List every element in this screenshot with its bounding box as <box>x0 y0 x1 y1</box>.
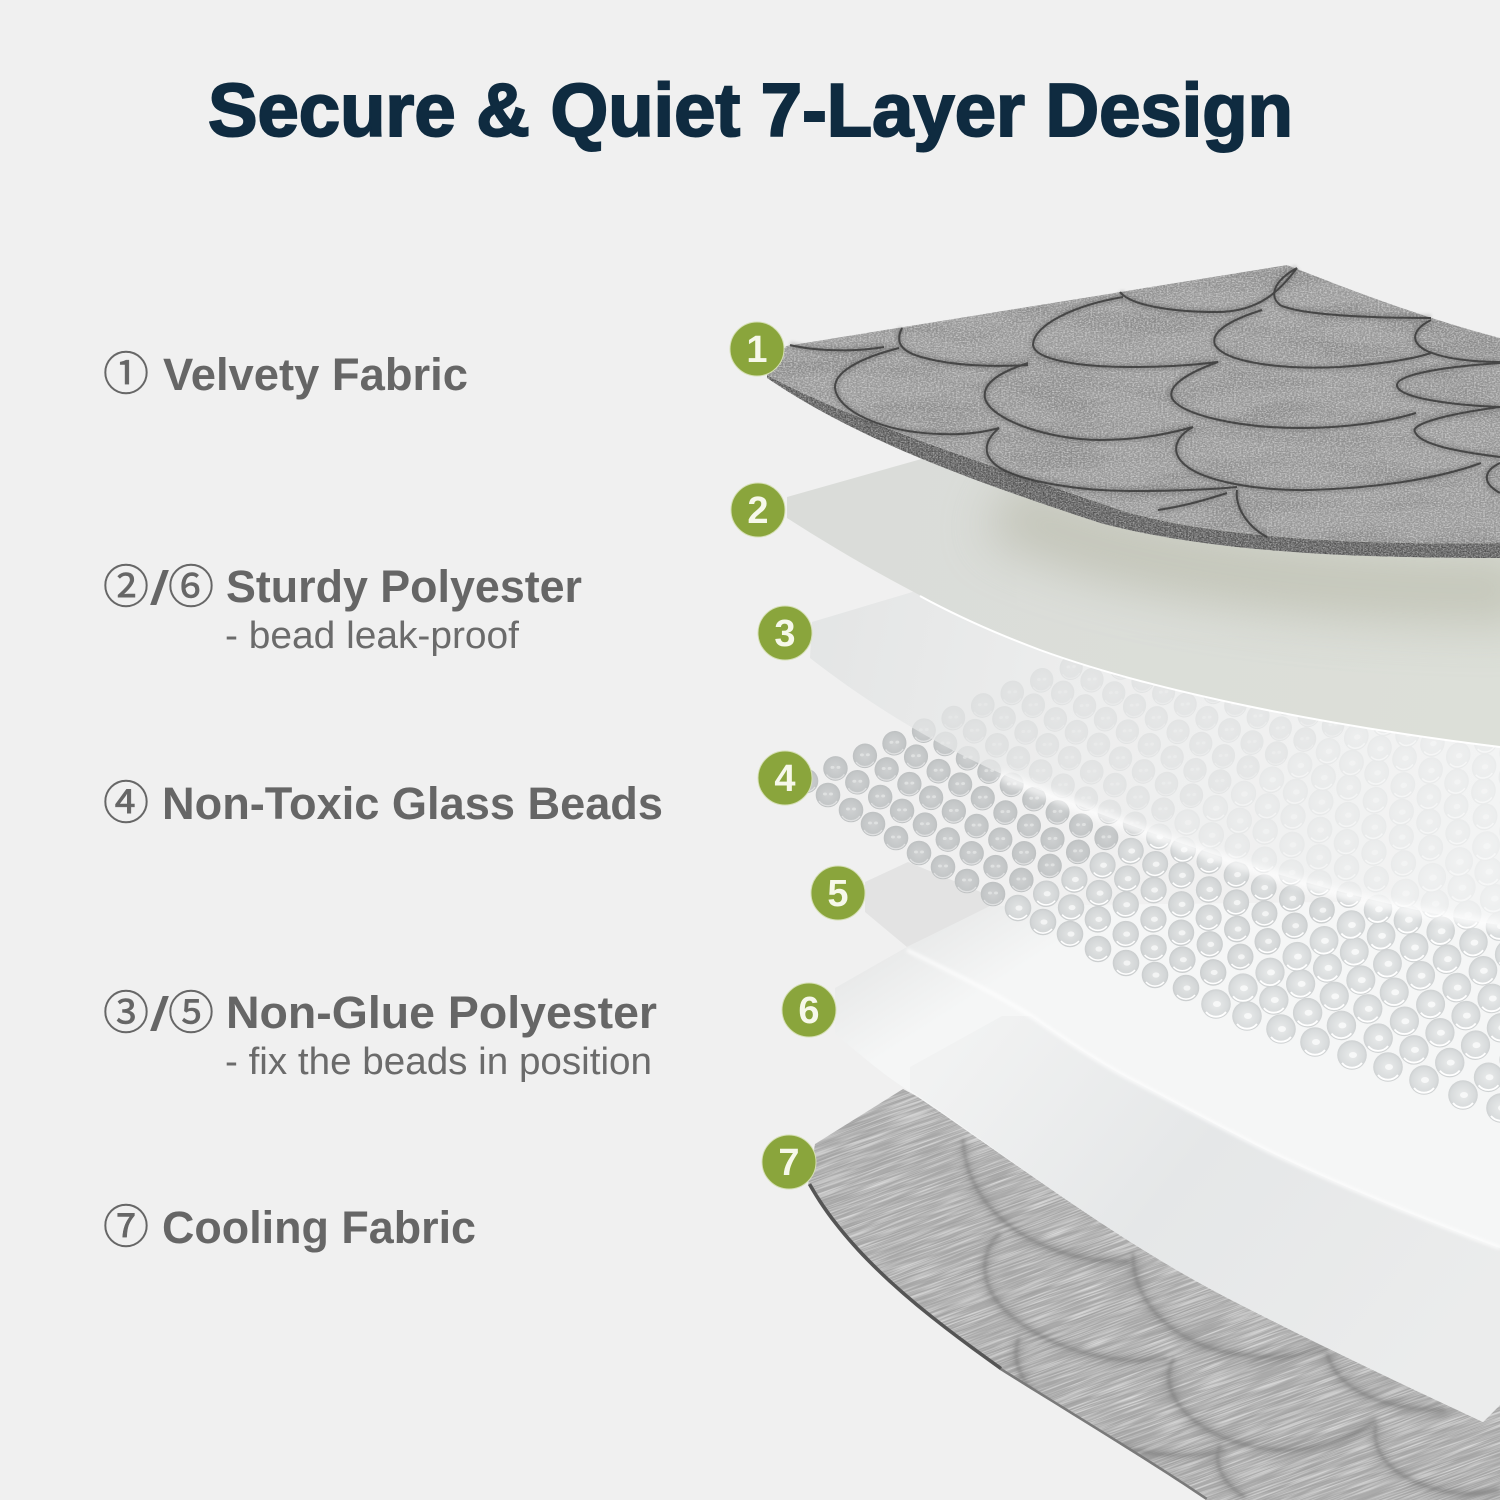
layer 5: non-glue polyester sheet <box>865 862 1000 947</box>
label: non-glue polyester: ⑤ <box>168 977 214 1043</box>
quilted scale stitching <box>790 268 1500 537</box>
label: velvety fabric: ① <box>103 338 149 404</box>
layer 3: non-glue polyester sheet <box>810 590 1500 925</box>
label: cooling fabric: ⑦ <box>103 1191 149 1257</box>
layer 4: glass beads <box>806 511 1500 1108</box>
label: non-glue polyester <box>103 977 657 1083</box>
badge 7: 7 <box>778 1142 800 1184</box>
badge 5 <box>811 866 865 920</box>
label: sturdy polyester: ② <box>103 551 149 617</box>
fabric edge thickness <box>767 375 1500 558</box>
badge 5: 5 <box>827 873 849 915</box>
label: sturdy polyester: Sturdy Polyester <box>226 561 582 612</box>
label: sturdy polyester: / <box>151 562 168 614</box>
label: sturdy polyester: ⑥ <box>168 551 214 617</box>
badge 6 <box>782 983 836 1037</box>
label: non-glue polyester: - fix the beads in position <box>225 1041 652 1083</box>
layer 2: sturdy polyester sheet <box>780 450 1500 750</box>
label: sturdy polyester <box>103 551 582 657</box>
fabric surface <box>767 265 1500 543</box>
badge 3 <box>758 606 812 660</box>
layer 7: cooling fabric <box>808 1089 1500 1500</box>
label: velvety fabric <box>103 338 468 404</box>
badge 2: 2 <box>747 490 769 532</box>
badge 6: 6 <box>798 990 820 1032</box>
badge 4 <box>758 751 812 805</box>
label: glass beads: Non-Toxic Glass Beads <box>162 778 663 829</box>
quilted scale shading <box>790 268 1500 537</box>
label: cooling fabric <box>103 1191 476 1257</box>
layer 6: sturdy polyester sheet <box>835 900 1500 1422</box>
badge 3: 3 <box>774 613 796 655</box>
label: glass beads: ④ <box>103 767 149 833</box>
label: non-glue polyester: ③ <box>103 977 149 1043</box>
label: non-glue polyester: Non-Glue Polyester <box>226 987 657 1038</box>
badge 7 <box>762 1135 816 1189</box>
label: sturdy polyester: - bead leak-proof <box>225 615 519 657</box>
label: velvety fabric: Velvety Fabric <box>163 349 468 400</box>
label: glass beads <box>103 767 663 833</box>
label: non-glue polyester: / <box>151 988 168 1040</box>
badge 2 <box>731 483 785 537</box>
label: cooling fabric: Cooling Fabric <box>162 1202 476 1253</box>
badge 1: 1 <box>746 329 768 371</box>
badge 4: 4 <box>774 758 796 800</box>
layer 1: velvety fabric <box>767 265 1500 558</box>
title: Secure & Quiet 7-Layer Design <box>208 68 1293 152</box>
badge 1 <box>730 322 784 376</box>
